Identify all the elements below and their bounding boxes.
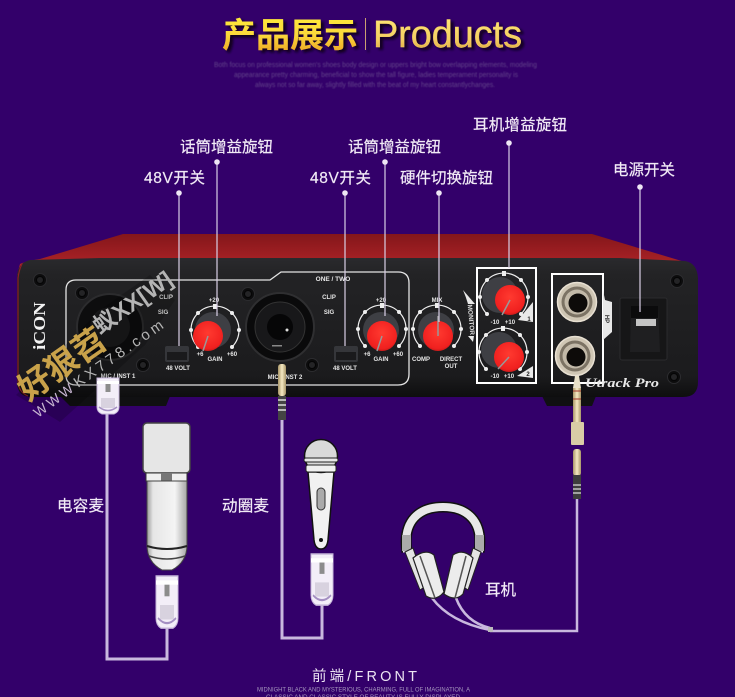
mic gain knob 2: +6 bbox=[364, 352, 371, 358]
XLR socket 1 bbox=[77, 294, 143, 360]
cable: condenser mic bbox=[107, 414, 167, 659]
audio interface device bbox=[17, 234, 698, 406]
mic gain knob 1: +20 bbox=[209, 298, 220, 304]
monitor mix knob: OUT bbox=[445, 364, 458, 370]
title: 产品展示 bbox=[222, 8, 358, 57]
footer heading: 前端/FRONT bbox=[312, 668, 417, 685]
icon: condenser mic XLR connector bbox=[156, 576, 178, 628]
icon: headphones bbox=[402, 507, 493, 632]
label: dynamic mic: 动圈麦 bbox=[222, 497, 269, 515]
watermark: WWW bbox=[30, 378, 79, 420]
callout: headphone gain knob bbox=[473, 116, 567, 268]
headphone gain knob 1: 1 bbox=[527, 317, 531, 323]
TRS plug into input 2 bbox=[278, 364, 286, 420]
headphone knob highlight box bbox=[477, 268, 536, 383]
subtitle text block: Both focus on professional women's shoes body design or uppers bright bow overlapping elements, modeling bbox=[214, 62, 537, 69]
title bbox=[222, 8, 522, 57]
callout: mic gain knob 2 bbox=[348, 138, 441, 316]
callout: power switch: 电源开关 bbox=[613, 161, 675, 179]
input labels: SIG bbox=[158, 310, 168, 316]
power switch bbox=[620, 298, 667, 360]
headphone jack 1 bbox=[558, 282, 596, 322]
mic gain knob 2: +60 bbox=[393, 352, 404, 358]
headphone jack 2 bbox=[556, 336, 594, 376]
input labels: MIC / INST 1 bbox=[101, 374, 136, 380]
combo socket 2 bbox=[246, 293, 314, 361]
monitor mix knob: MIX bbox=[432, 298, 442, 304]
footer text bbox=[257, 688, 470, 697]
headphone gain knob 1 bbox=[478, 271, 533, 326]
watermark: 蚁XX[W] bbox=[88, 266, 177, 339]
label: headphones: 耳机 bbox=[485, 581, 516, 599]
monitor mix knob: DIRECT bbox=[440, 357, 462, 363]
HP tag bbox=[603, 290, 612, 340]
subtitle text block: appearance pretty charming, beneficial to show the tall figure, ladies temperament personality is bbox=[234, 72, 518, 79]
callout: hardware switch knob: 硬件切换旋钮 bbox=[400, 169, 493, 187]
callout: power switch bbox=[613, 161, 675, 312]
input labels: CLIP bbox=[322, 295, 336, 301]
device feet bbox=[60, 396, 596, 406]
subtitle text block bbox=[214, 62, 537, 89]
mic gain knob 2 bbox=[356, 298, 408, 363]
icon: condenser microphone bbox=[143, 423, 190, 570]
input labels: CLIP bbox=[159, 295, 173, 301]
headphone gain knob 2 bbox=[477, 326, 533, 380]
cable: dynamic mic bbox=[282, 420, 322, 638]
subtitle text block: always not so far away, slightly filled with the beat of my heart constantlychanges. bbox=[255, 82, 495, 89]
callout: headphone gain knob: 耳机增益旋钮 bbox=[473, 116, 567, 134]
mic gain knob 1 bbox=[189, 298, 241, 363]
control section outline bbox=[66, 272, 409, 385]
footer text: MIDNIGHT BLACK AND MYSTERIOUS, CHARMING, FULL OF IMAGINATION, A bbox=[257, 688, 470, 694]
headphone gain knob 2: +10 bbox=[504, 374, 515, 380]
monitor tag bbox=[463, 290, 475, 342]
headphone gain knob 1: +10 bbox=[505, 320, 516, 326]
black front panel bbox=[17, 258, 698, 397]
callout: 48V switch 2 bbox=[310, 169, 371, 346]
mic gain knob 2: +20 bbox=[376, 298, 387, 304]
watermark bbox=[6, 266, 177, 422]
monitor mix knob: COMP bbox=[412, 357, 430, 363]
input labels: SIG bbox=[324, 310, 334, 316]
monitor tag: MONITOR bbox=[466, 304, 475, 336]
icon: dynamic microphone bbox=[304, 440, 338, 549]
callout: mic gain knob 1: 话筒增益旋钮 bbox=[180, 138, 273, 156]
XLR plug into input 1 bbox=[97, 378, 119, 414]
brand Utrack Pro: Utrack Pro bbox=[585, 375, 660, 390]
icon: dynamic mic XLR connector bbox=[311, 554, 333, 605]
48V switch 1 bbox=[165, 346, 190, 372]
callout: mic gain knob 1 bbox=[180, 138, 273, 316]
mic gain knob 1: GAIN bbox=[208, 357, 222, 363]
watermark: 好狠苕 bbox=[6, 314, 115, 410]
watermark: KX778.com bbox=[71, 315, 170, 391]
mic gain knob 1: +6 bbox=[197, 352, 204, 358]
input labels bbox=[101, 276, 350, 381]
mic gain knob 2: GAIN bbox=[374, 357, 388, 363]
headphone adapter plug bbox=[571, 376, 584, 499]
48V switch 2: 48 VOLT bbox=[333, 366, 357, 372]
HP tag: HP bbox=[603, 315, 609, 323]
callout: 48V switch 1 bbox=[144, 169, 205, 346]
title: Products bbox=[373, 14, 522, 56]
callout: 48V switch 2: 48V开关 bbox=[310, 169, 371, 187]
brand iCON: iCON bbox=[30, 301, 49, 350]
corner and panel screws bbox=[34, 274, 684, 384]
callout: 48V switch 1: 48V开关 bbox=[144, 169, 205, 187]
red top cover bbox=[17, 234, 697, 275]
input labels: MIC / INST 2 bbox=[268, 375, 303, 381]
headphone gain knob 1: -10 bbox=[491, 320, 500, 326]
mic gain knob 1: +60 bbox=[227, 352, 238, 358]
label: condenser mic: 电容麦 bbox=[57, 497, 104, 515]
48V switch 1: 48 VOLT bbox=[166, 366, 190, 372]
headphone gain knob 2: -10 bbox=[491, 374, 500, 380]
callout: mic gain knob 2: 话筒增益旋钮 bbox=[348, 138, 441, 156]
48V switch 2 bbox=[333, 346, 358, 372]
headphone gain knob 2: 2 bbox=[526, 372, 530, 378]
cable: headphones bbox=[432, 498, 577, 631]
headphone jack highlight box bbox=[552, 274, 603, 383]
monitor mix knob bbox=[411, 298, 463, 370]
input labels: ONE / TWO bbox=[316, 276, 350, 283]
callout: hardware switch knob bbox=[400, 169, 493, 322]
